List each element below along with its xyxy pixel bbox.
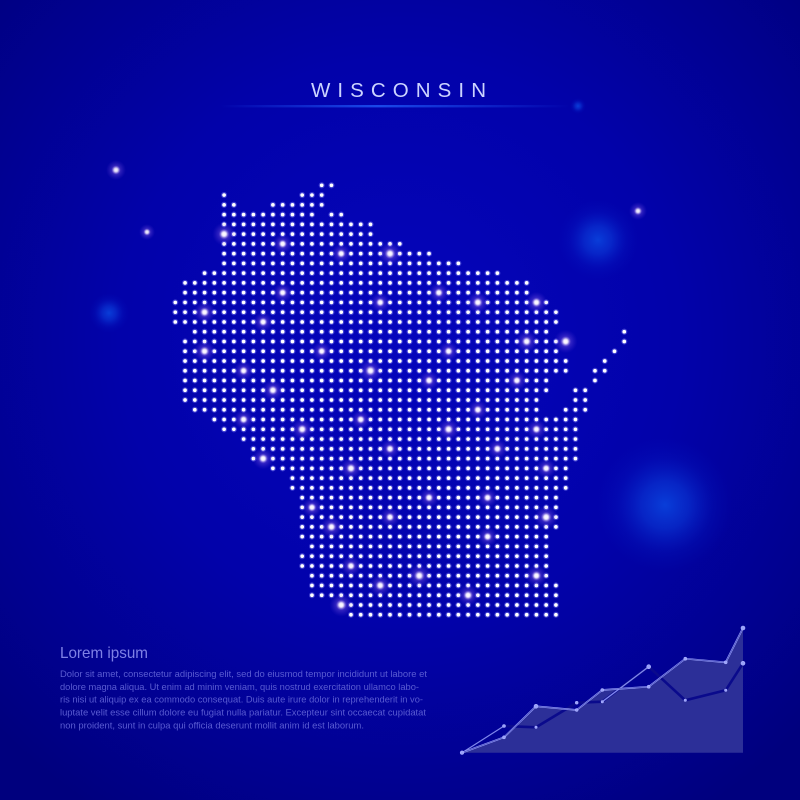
text paragraph: ris nisi ut aliquip ex ea commodo consequat. Duis aute irure dolor in reprehenderit in vo- <box>60 694 423 704</box>
text paragraph: Dolor sit amet, consectetur adipiscing elit, sed do eiusmod tempor incididunt ut labore et <box>60 668 427 679</box>
chart series A: top line <box>462 628 743 753</box>
map lights: bright city glows <box>194 222 577 617</box>
glow spot: left <box>89 293 129 333</box>
chart series B: dark shadow line <box>504 663 743 727</box>
map dots: halo <box>175 185 624 615</box>
glow spot: title line end <box>570 98 586 114</box>
glow spot: upper right <box>558 200 638 280</box>
map dots: white cores <box>175 185 624 615</box>
dotted map of Wisconsin <box>175 185 624 617</box>
star: upper right <box>629 202 647 220</box>
text paragraph: non proident, sunt in culpa qui officia deserunt mollit anim id est laborum. <box>60 720 364 730</box>
text heading: Lorem ipsum <box>60 645 148 662</box>
chart markers <box>460 626 745 754</box>
area line chart <box>460 626 745 754</box>
star: upper left <box>106 160 126 180</box>
chart series A: inner line <box>462 628 743 753</box>
text paragraph: luptate velit esse cillum dolore eu fugiat nulla pariatur. Excepteur sint occaecat cupidatat <box>60 706 426 718</box>
text block: Lorem ipsum <box>60 645 427 730</box>
chart series B: rising segment <box>602 667 649 702</box>
glow spot: large lower right <box>597 437 733 573</box>
chart series B: light start segment <box>462 726 504 753</box>
text paragraph: dolore magna aliqua. Ut enim ad minim veniam, quis nostrud exercitation ullamco labo- <box>60 681 419 692</box>
star: left middle <box>139 224 155 240</box>
title: WISCONSIN: WISCONSIN <box>311 79 486 102</box>
title underline glow <box>220 105 570 107</box>
text paragraph <box>60 668 427 730</box>
chart area fill <box>462 628 743 753</box>
